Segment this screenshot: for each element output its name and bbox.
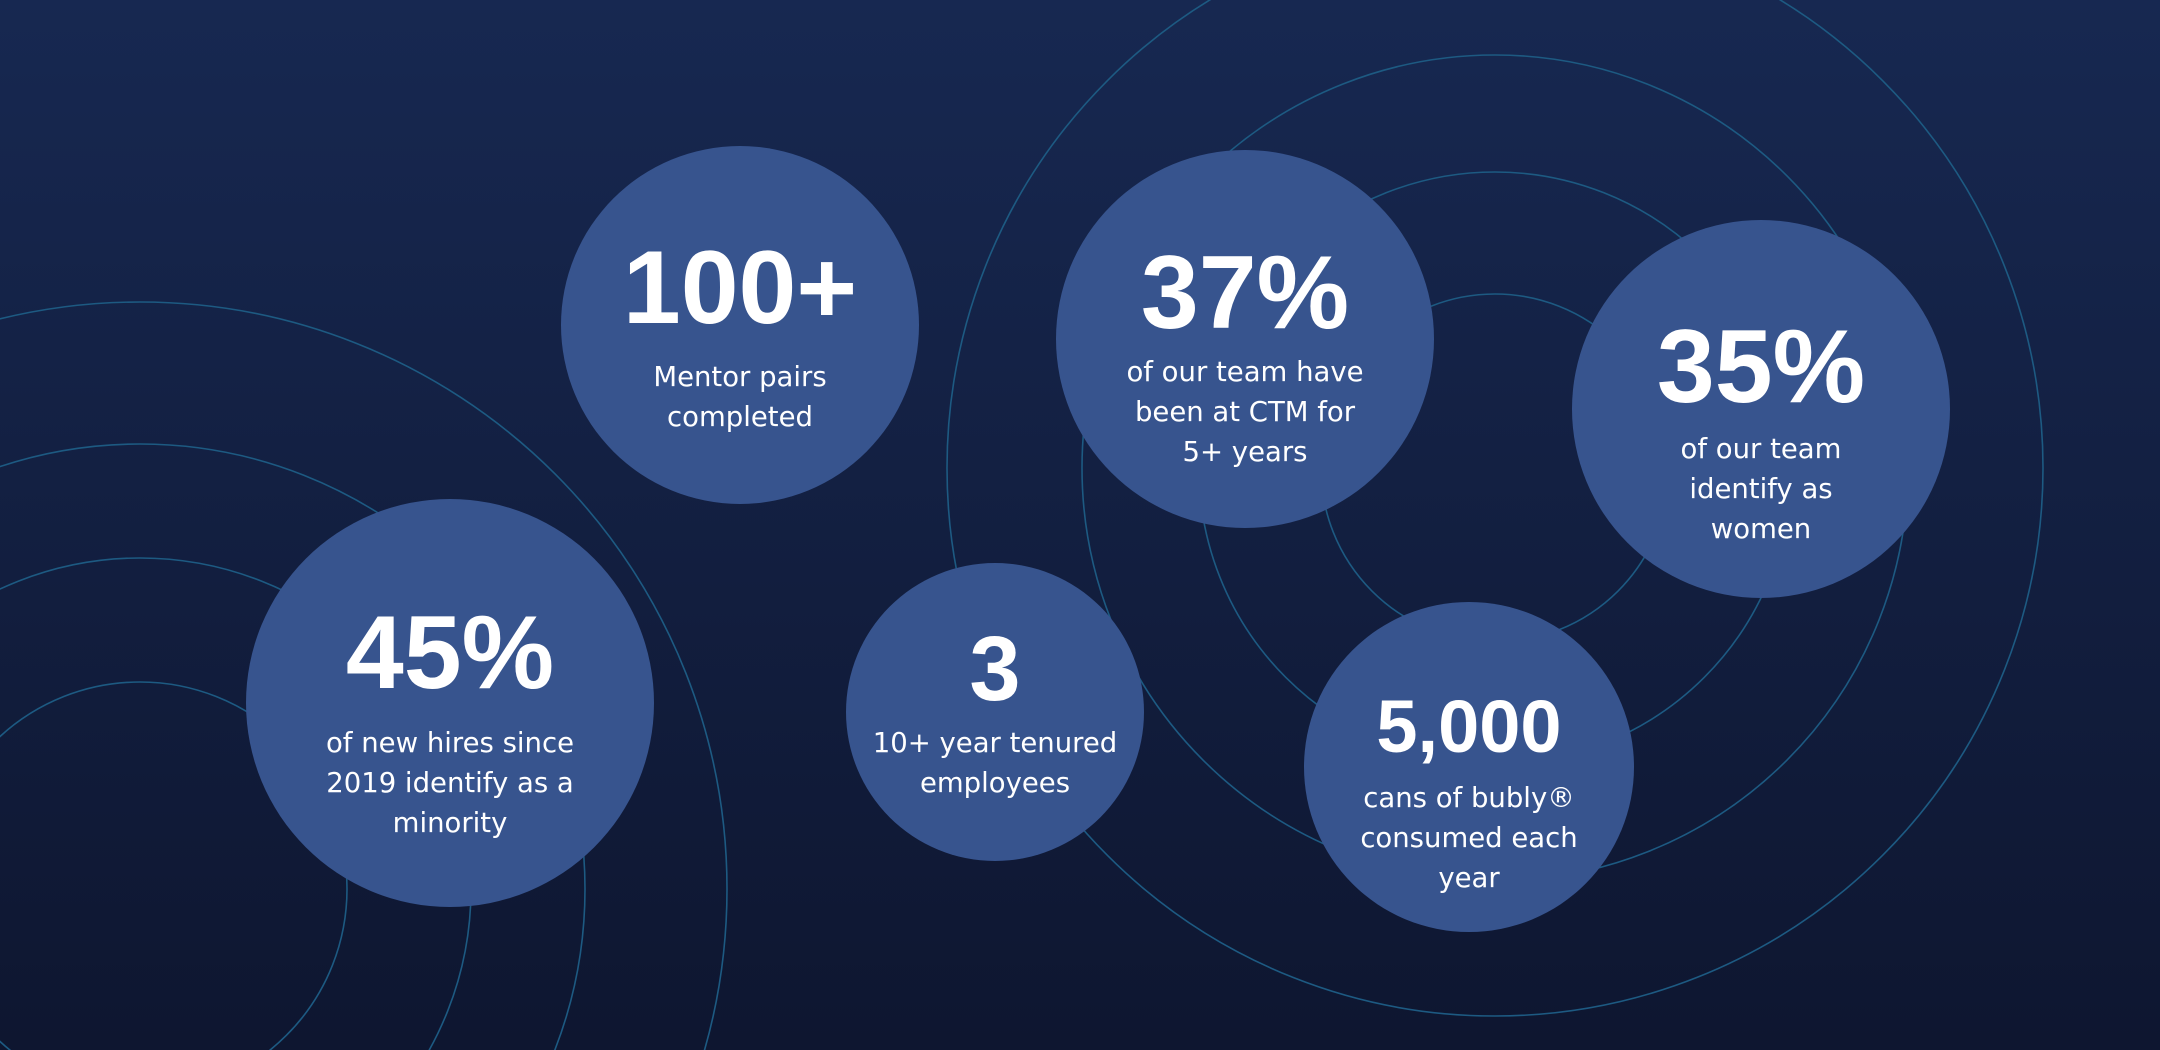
stat: 3	[846, 563, 1144, 861]
stat: 5,000	[1304, 602, 1634, 932]
label: 45%: of new hires since	[326, 727, 574, 759]
number: 35%: 35%	[1657, 309, 1865, 425]
number: 3: 3	[969, 618, 1021, 720]
number: 5,000: 5,000	[1376, 685, 1562, 768]
label: 37%: of our team have	[1126, 356, 1364, 388]
stat: 35%	[1572, 220, 1950, 598]
label: 5,000: year	[1438, 862, 1500, 894]
number: 45%: 45%	[346, 595, 554, 711]
label: 37%: been at CTM for	[1135, 396, 1356, 428]
number: 37%: 37%	[1141, 235, 1349, 351]
stat: 45%	[246, 499, 654, 907]
stat: 100+ mentor pairs	[561, 146, 919, 504]
label: 3: 10+ year tenured	[873, 727, 1117, 759]
label: mentor pairs: Mentor pairs	[653, 361, 827, 393]
label: 5,000: cans of bubly®	[1363, 782, 1575, 814]
label: 45%: 2019 identify as a	[326, 767, 574, 799]
stat: 37%	[1056, 150, 1434, 528]
label: 35%: of our team	[1681, 433, 1841, 465]
label: 5,000: consumed each	[1360, 822, 1578, 854]
label: mentor pairs: completed	[667, 401, 813, 433]
label: 3: employees	[920, 767, 1070, 799]
number: 100+: 100+	[623, 230, 857, 346]
label: 35%: women	[1711, 513, 1811, 545]
label: 37%: 5+ years	[1183, 436, 1307, 468]
label: 35%: identify as	[1689, 473, 1833, 505]
label: 45%: minority	[393, 807, 507, 839]
